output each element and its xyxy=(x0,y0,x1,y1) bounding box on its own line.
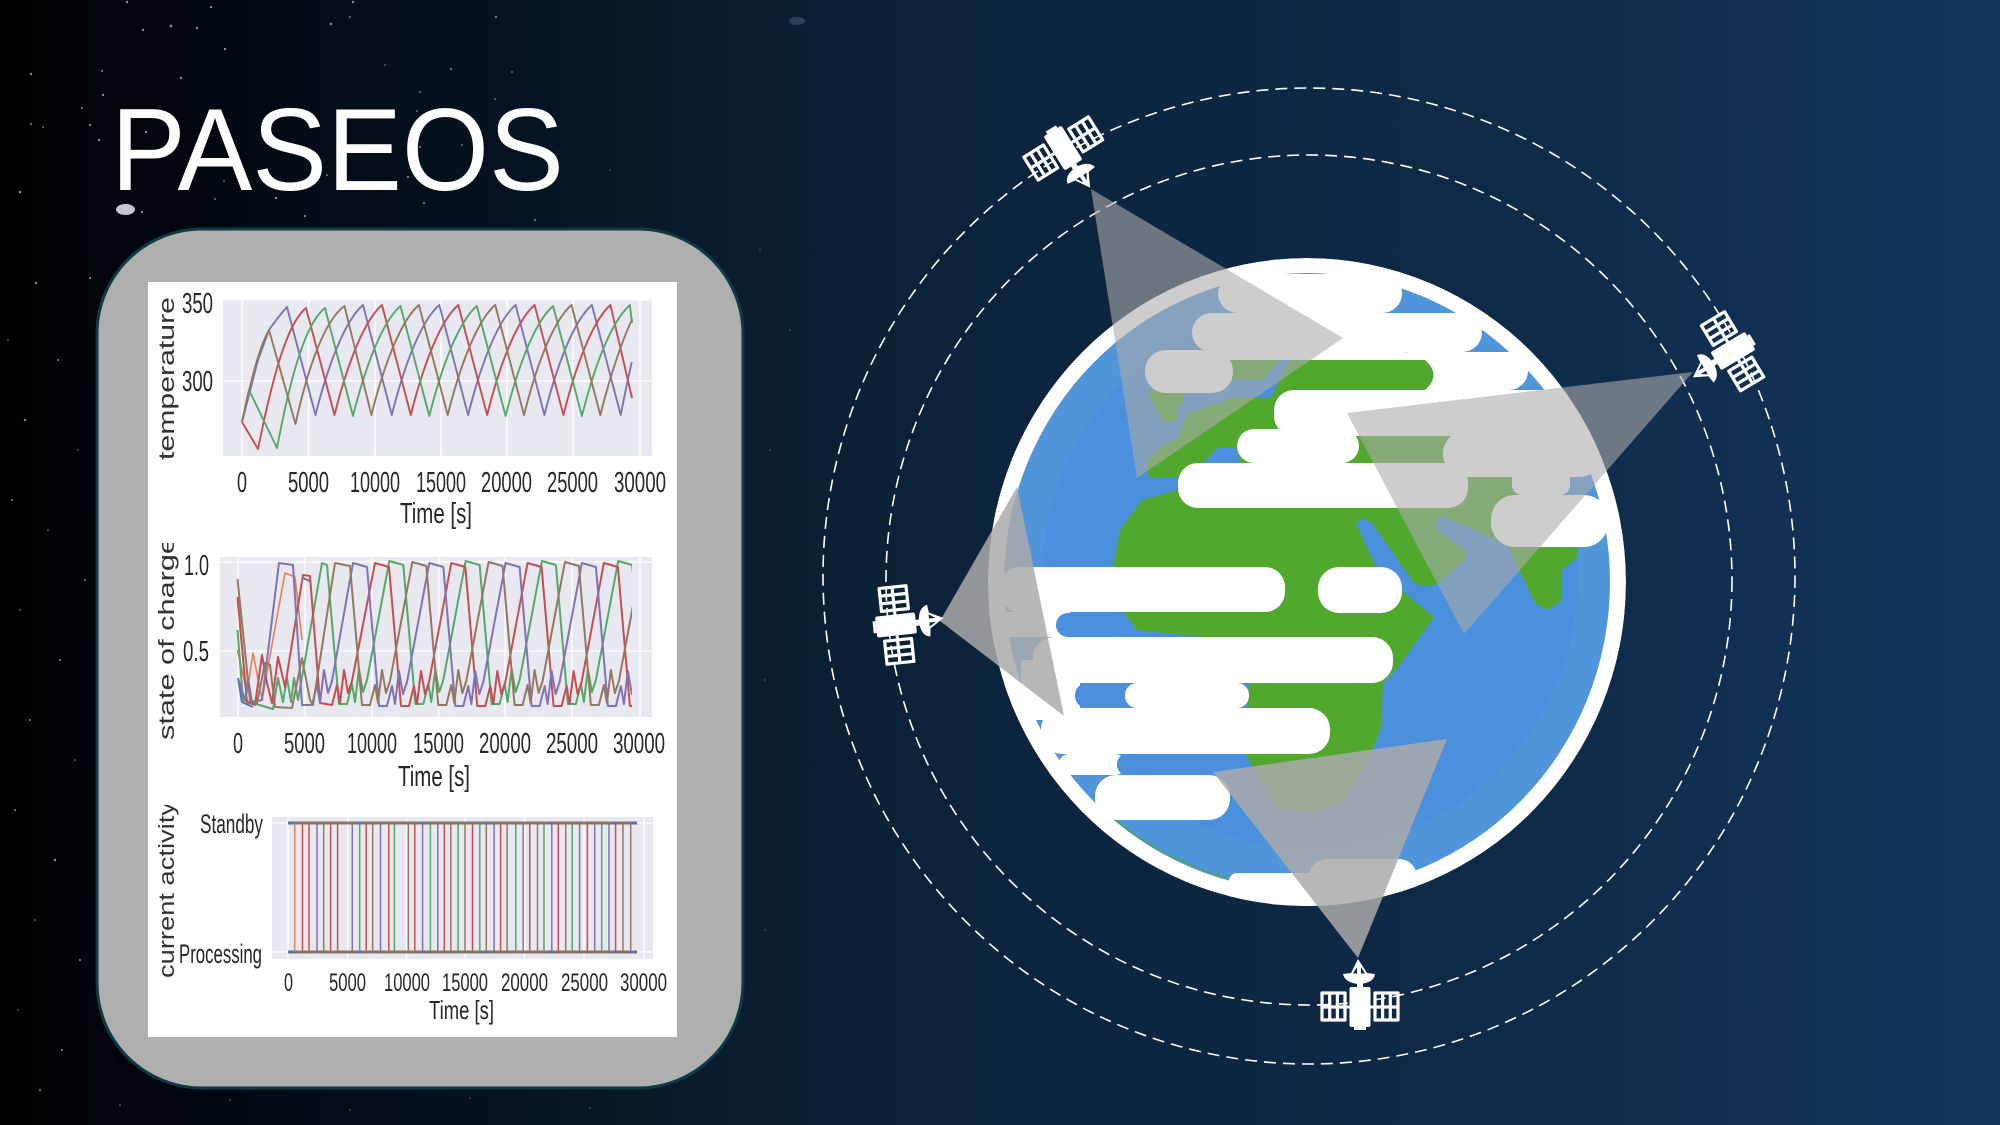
axis labels: state of charge: 0 xyxy=(233,728,243,760)
axis labels: current activity: 5000 xyxy=(329,969,366,997)
axis labels: current activity: 25000 xyxy=(561,969,608,997)
icon: satellite right xyxy=(1672,307,1772,408)
chart: temperature xyxy=(154,288,666,530)
starfield xyxy=(7,1,791,1111)
axis labels: current activity: Standby xyxy=(200,809,263,839)
sensor cone: bottom satellite xyxy=(1213,739,1447,958)
axis labels: current activity xyxy=(154,802,667,1025)
axis labels: state of charge: 30000 xyxy=(613,728,665,760)
chart: state of charge xyxy=(154,537,680,793)
axis labels: current activity: 0 xyxy=(284,969,293,997)
axis labels: temperature: 0 xyxy=(237,467,247,499)
land masses xyxy=(1113,360,1578,813)
orbit: inner xyxy=(886,155,1732,1005)
blob near title xyxy=(116,204,135,215)
axis labels: state of charge: 25000 xyxy=(546,728,598,760)
axis labels: state of charge: Time [s] xyxy=(398,761,470,793)
axis labels: state of charge: 15000 xyxy=(413,728,464,760)
earth xyxy=(985,258,1626,913)
faint distant blob xyxy=(789,17,805,25)
chart: current activity xyxy=(154,802,667,1025)
axis labels: temperature: 30000 xyxy=(614,467,666,499)
axis labels: state of charge xyxy=(154,537,665,793)
icon: satellite left xyxy=(869,582,948,665)
ocean xyxy=(1004,273,1610,891)
axis labels: state of charge: 0.5 xyxy=(183,636,209,668)
icon: satellite top xyxy=(1019,108,1121,209)
axis labels: current activity: 15000 xyxy=(442,969,488,997)
title: PASEOS xyxy=(111,84,564,215)
axis labels: current activity: current activity xyxy=(154,802,179,978)
axis labels: temperature xyxy=(154,288,666,530)
sensor cone: left satellite xyxy=(940,487,1064,716)
panel: simulation plots xyxy=(97,88,1795,1088)
clouds over land xyxy=(1000,274,1608,913)
axis labels: temperature: 15000 xyxy=(416,467,466,499)
axis labels: temperature: 5000 xyxy=(288,467,329,499)
earth rim xyxy=(988,258,1626,906)
axis labels: current activity: Processing xyxy=(179,939,262,969)
axis labels: state of charge: 1.0 xyxy=(184,550,209,582)
axis labels: current activity: 30000 xyxy=(620,969,667,997)
axis labels: temperature: 10000 xyxy=(350,467,400,499)
white plot sheet xyxy=(148,282,677,1037)
axis labels: current activity: Time [s] xyxy=(429,995,494,1025)
axis labels: temperature: 20000 xyxy=(481,467,532,499)
axis labels: state of charge: 10000 xyxy=(347,728,397,760)
icon: satellite bottom xyxy=(1322,959,1398,1030)
axis labels: temperature: 350 xyxy=(182,288,213,320)
axis labels: temperature: Time [s] xyxy=(400,498,472,530)
axis labels: temperature: 300 xyxy=(182,366,213,398)
orbit: outer xyxy=(823,88,1795,1064)
axis labels: temperature: 25000 xyxy=(547,467,598,499)
axis labels: state of charge: state of charge xyxy=(154,537,179,740)
axis labels: state of charge: 20000 xyxy=(479,728,531,760)
axis labels: current activity: 20000 xyxy=(501,969,548,997)
sensor cone: top satellite xyxy=(1091,189,1343,478)
ocean gaps between clouds xyxy=(1056,613,1125,773)
sensor cone: right satellite xyxy=(1347,372,1693,634)
axis labels: current activity: 10000 xyxy=(384,969,430,997)
clouds behind land xyxy=(985,352,1528,775)
axis labels: state of charge: 5000 xyxy=(284,728,325,760)
axis labels: temperature: temperature xyxy=(154,297,179,460)
